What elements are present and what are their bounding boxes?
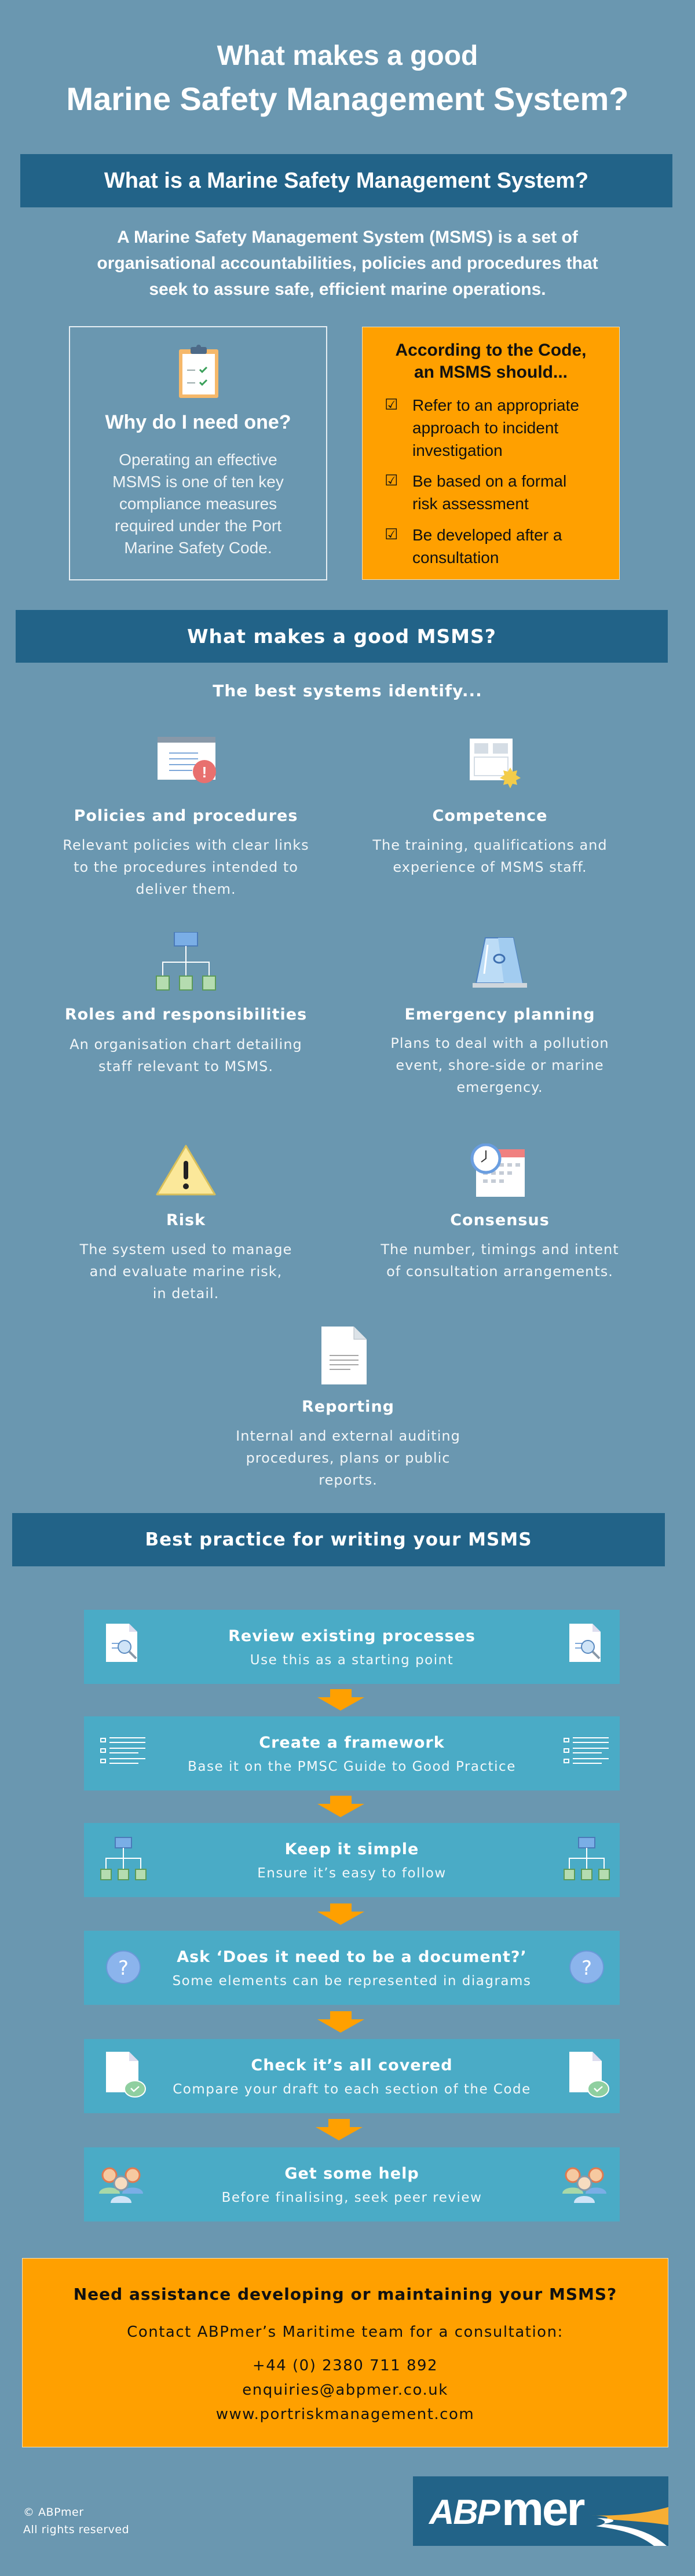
arrow <box>316 2119 363 2140</box>
panel: according to the code <box>362 327 620 580</box>
step 4: ask: Some elements can be represented in diagrams <box>173 1974 531 1989</box>
item: policies: Relevant policies with clear links <box>63 837 309 853</box>
step 2: framework: Create a framework <box>259 1734 445 1752</box>
list item 1: Refer to an appropriate <box>412 396 579 414</box>
arrow <box>317 2011 364 2033</box>
icon: emergency beacon <box>473 937 527 988</box>
icon: competence certificate <box>470 739 521 788</box>
banner: what is MSMS <box>20 154 672 207</box>
banner: what is MSMS: What is a Marine Safety Management System? <box>104 168 588 192</box>
item: risk: The system used to manage <box>80 1241 292 1258</box>
item: competence <box>372 739 608 875</box>
callout: contact: Contact ABPmer’s Maritime team for a consultation: <box>127 2323 564 2341</box>
item: roles <box>65 932 307 1075</box>
callout: contact: +44 (0) 2380 711 892 <box>253 2357 438 2374</box>
icon: policies document <box>158 737 216 783</box>
banner: what makes a good MSMS: What makes a good MSMS? <box>187 625 496 648</box>
step 1: review: Review existing processes <box>228 1627 475 1645</box>
item: competence: experience of MSMS staff. <box>393 859 587 875</box>
item: emergency: Plans to deal with a pollution <box>390 1035 609 1051</box>
heading: code <box>395 341 586 382</box>
item: roles: Roles and responsibilities <box>65 1006 307 1024</box>
text: why body: Marine Safety Code. <box>124 539 272 557</box>
arrow <box>317 1689 364 1711</box>
item: roles: An organisation chart detailing <box>70 1036 302 1053</box>
list item 3: consultation <box>412 549 499 567</box>
list item 1: ☑ <box>385 396 398 414</box>
text: why body: Operating an effective <box>119 451 277 469</box>
callout: contact <box>22 2258 668 2447</box>
callout: contact: Need assistance developing or maintaining your MSMS? <box>74 2285 617 2304</box>
list item 2: Be based on a formal <box>412 472 566 490</box>
item: policies: to the procedures intended to <box>74 859 298 875</box>
banner: best practice: Best practice for writing your MSMS <box>145 1529 532 1550</box>
item: policies <box>63 737 309 897</box>
footer: copyright: All rights reserved <box>23 2523 129 2536</box>
step 3: keep it simple: Ensure it’s easy to follow <box>257 1866 447 1881</box>
step 6: help <box>84 2147 620 2221</box>
item: consensus: of consultation arrangements. <box>386 1263 613 1280</box>
step 5: check: Check it’s all covered <box>251 2056 453 2074</box>
icon: warning triangle <box>156 1145 215 1196</box>
list item 3: ☑ <box>385 526 398 543</box>
footer: copyright <box>23 2506 129 2536</box>
item: risk <box>80 1145 292 1302</box>
callout: contact: www.portriskmanagement.com <box>216 2406 474 2423</box>
step 2: framework <box>84 1716 620 1791</box>
footer: copyright: © ABPmer <box>23 2506 84 2519</box>
text: why body: MSMS is one of ten key <box>112 473 284 491</box>
item: consensus: The number, timings and intent <box>381 1241 619 1258</box>
step 5: check: Compare your draft to each section of the Code <box>173 2082 531 2097</box>
step 2: framework: Base it on the PMSC Guide to Good Practice <box>188 1759 516 1774</box>
item: risk: in detail. <box>153 1285 219 1302</box>
step 1: review: Use this as a starting point <box>250 1653 453 1668</box>
item: roles: staff relevant to MSMS. <box>98 1058 273 1075</box>
step 4: ask: ? <box>581 1957 592 1980</box>
step 5: check <box>84 2039 620 2113</box>
text: why body <box>112 451 284 557</box>
icon: policies document: ! <box>202 763 207 781</box>
panel: why do I need one <box>69 326 327 580</box>
intro paragraph <box>97 228 598 299</box>
list item 1 <box>385 396 579 459</box>
step 1: review <box>84 1610 620 1684</box>
banner: best practice <box>12 1513 665 1566</box>
list item 2: ☑ <box>385 472 398 489</box>
heading: code: According to the Code, <box>395 341 586 360</box>
text: why body: compliance measures <box>119 495 277 513</box>
title: What makes a good <box>217 41 478 71</box>
step 6: help: Get some help <box>284 2165 419 2183</box>
intro paragraph: A Marine Safety Management System (MSMS) is a set of <box>117 228 578 247</box>
item: risk: Risk <box>166 1211 206 1229</box>
intro paragraph: seek to assure safe, efficient marine operations. <box>149 280 546 299</box>
item: risk: and evaluate marine risk, <box>90 1263 282 1280</box>
item: reporting: Internal and external auditing <box>236 1428 460 1444</box>
logo: ABPmer: mer <box>502 2483 585 2535</box>
logo: ABPmer <box>413 2476 668 2546</box>
item: competence: Competence <box>433 807 547 825</box>
step 3: keep it simple: Keep it simple <box>285 1840 419 1858</box>
icon: report document <box>321 1327 367 1384</box>
item: emergency: Emergency planning <box>404 1006 595 1024</box>
arrow <box>317 1903 364 1925</box>
item: policies: Policies and procedures <box>74 807 298 825</box>
step 4: ask: Ask ‘Does it need to be a document?’ <box>177 1948 527 1966</box>
step 4: ask <box>84 1931 620 2005</box>
title: Marine Safety Management System? <box>66 81 628 117</box>
step 6: help: Before finalising, seek peer review <box>222 2190 482 2205</box>
banner: what makes a good MSMS <box>16 610 668 663</box>
item: emergency: emergency. <box>456 1079 543 1095</box>
icon: org chart <box>156 932 216 991</box>
item: policies: deliver them. <box>136 881 236 897</box>
heading: why: Why do I need one? <box>105 411 291 433</box>
step 4: ask: ? <box>118 1957 129 1980</box>
list item 1: investigation <box>412 441 503 459</box>
text: why body: required under the Port <box>115 517 281 535</box>
item: reporting: Reporting <box>302 1398 394 1416</box>
logo: ABPmer: ABP <box>428 2493 501 2531</box>
subheading: The best systems identify... <box>213 681 482 700</box>
intro paragraph: organisational accountabilities, policies and procedures that <box>97 254 598 273</box>
arrow <box>317 1796 364 1817</box>
item: reporting: reports. <box>319 1472 378 1488</box>
list item 2 <box>385 472 566 513</box>
item: reporting: procedures, plans or public <box>246 1450 450 1466</box>
item: consensus: Consensus <box>450 1211 550 1229</box>
callout: contact: enquiries@abpmer.co.uk <box>242 2381 448 2399</box>
item: emergency <box>390 937 609 1095</box>
item: emergency: event, shore-side or marine <box>396 1057 604 1073</box>
icon: calendar clock <box>470 1143 525 1197</box>
item: reporting <box>236 1327 460 1488</box>
icon: clipboard <box>179 345 218 398</box>
list item 2: risk assessment <box>412 495 529 513</box>
item: competence: The training, qualifications and <box>372 837 608 853</box>
title <box>66 41 628 117</box>
step 3: keep it simple <box>84 1823 620 1897</box>
item: consensus <box>381 1143 619 1280</box>
heading: code: an MSMS should... <box>414 363 568 382</box>
list item 3 <box>385 526 562 567</box>
list item 1: approach to incident <box>412 419 558 437</box>
list item 3: Be developed after a <box>412 526 562 544</box>
